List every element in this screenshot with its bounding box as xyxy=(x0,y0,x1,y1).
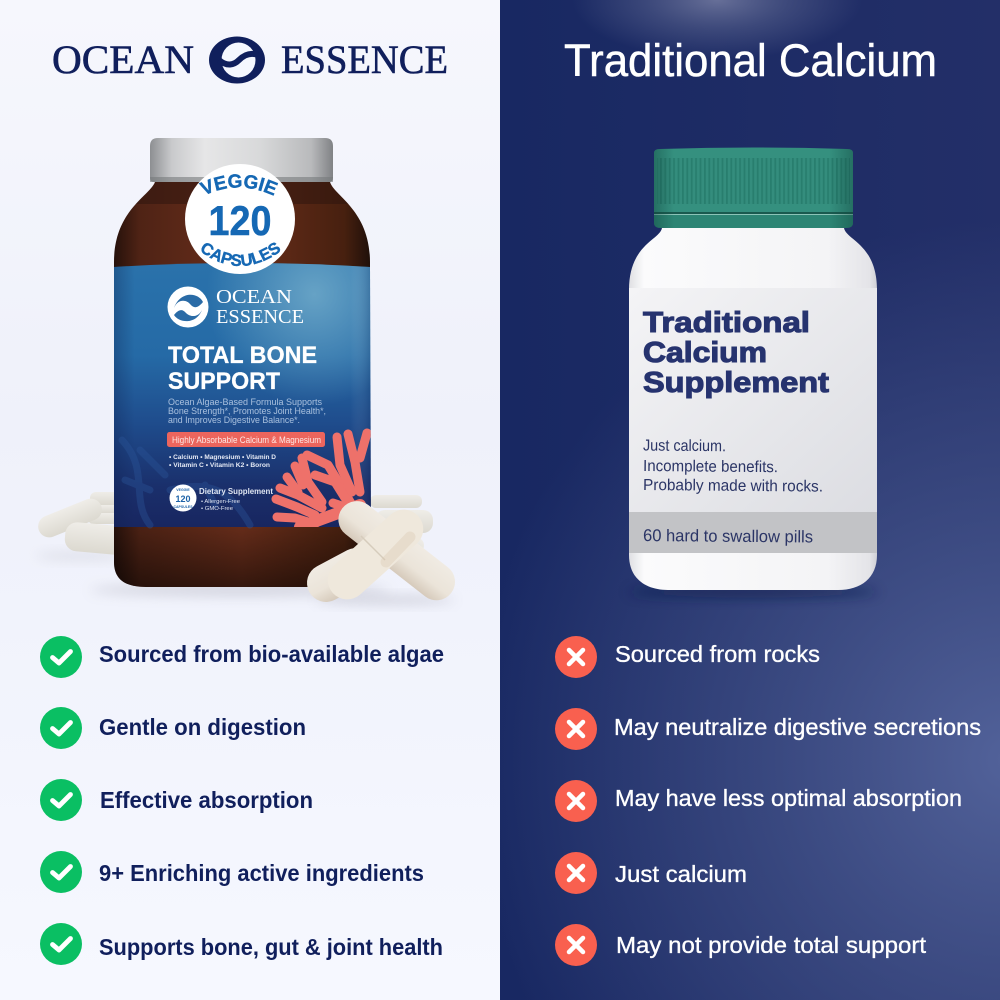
capsule badge: VEGGIE xyxy=(198,174,278,196)
label pill: Highly Absorbable Calcium & Magnesium xyxy=(172,435,321,445)
label description xyxy=(168,397,326,426)
green cap xyxy=(654,148,853,228)
label heading xyxy=(643,307,829,399)
label heading: Supplement xyxy=(643,367,829,399)
label description: Ocean Algae-Based Formula Supports xyxy=(168,397,322,408)
label description: Bone Strength*, Promotes Joint Health*, xyxy=(168,406,326,417)
ingredients xyxy=(169,454,276,469)
bottle label: SUPPORT xyxy=(168,368,280,395)
label heading: Calcium xyxy=(643,337,767,369)
label logo: ESSENCE xyxy=(216,306,304,328)
bottle label xyxy=(114,263,371,527)
silver cap xyxy=(150,138,333,182)
item: Sourced from rocks: Sourced from rocks xyxy=(615,641,820,667)
background kelp xyxy=(122,440,250,525)
capsules behind bottle xyxy=(35,492,433,560)
item: Effective absorption: Effective absorption xyxy=(100,787,313,813)
label footer: 60 hard to swallow pills xyxy=(643,526,813,546)
dietary text xyxy=(199,487,273,512)
dietary text: • GMO-Free xyxy=(201,506,233,512)
item: May neutralize digestive secretions: May neutralize digestive secretions xyxy=(614,714,981,740)
item: May have less optimal absorption xyxy=(555,780,962,822)
item: Sourced from bio-available algae xyxy=(40,636,444,678)
list: drawbacks xyxy=(555,636,981,966)
label logo: OCEAN xyxy=(216,286,292,308)
item: Just calcium xyxy=(555,852,747,894)
item: Gentle on digestion: Gentle on digestion xyxy=(99,714,306,740)
item: May have less optimal absorption: May have less optimal absorption xyxy=(615,785,962,811)
bottle glass xyxy=(114,182,370,587)
item: Just calcium: Just calcium xyxy=(615,861,747,887)
label text: Incomplete benefits. xyxy=(643,458,778,476)
heading: Ocean Essence logo: OCEAN xyxy=(52,37,194,82)
item: May not provide total support: May not provide total support xyxy=(616,932,927,958)
capsule badge: 120 xyxy=(208,197,272,244)
item: 9+ Enriching active ingredients xyxy=(40,851,424,893)
label title: TOTAL BONE xyxy=(168,342,317,369)
bottle body xyxy=(629,228,877,590)
item: May neutralize digestive secretions xyxy=(555,708,981,750)
capsule badge xyxy=(185,164,295,274)
panel: right background xyxy=(500,0,1000,1000)
item: Effective absorption xyxy=(40,779,313,821)
label text: Just calcium. xyxy=(643,438,726,455)
ingredients: • Vitamin C • Vitamin K2 • Boron xyxy=(169,462,270,469)
label text xyxy=(643,438,823,496)
mini badge: CAPSULES xyxy=(173,505,193,509)
item: Gentle on digestion xyxy=(40,707,306,749)
list: benefits xyxy=(40,636,444,965)
label logo xyxy=(168,286,304,328)
panel: left background xyxy=(0,0,500,1000)
item: Supports bone, gut & joint health: Supports bone, gut & joint health xyxy=(99,934,443,960)
product: Ocean Essence bottle with capsules xyxy=(38,138,455,608)
capsules in front xyxy=(300,494,462,609)
dietary text: • Allergen-Free xyxy=(201,499,240,505)
coral xyxy=(276,433,367,527)
product: traditional calcium bottle xyxy=(628,148,878,598)
item: Sourced from rocks xyxy=(555,636,820,678)
label heading: Traditional xyxy=(643,307,810,339)
bottle label xyxy=(629,288,877,553)
item: Sourced from bio-available algae: Sourced from bio-available algae xyxy=(99,641,444,667)
mini badge: 120 xyxy=(175,494,191,504)
capsule badge: CAPSULES xyxy=(201,242,280,266)
item: Supports bone, gut & joint health xyxy=(40,923,443,965)
label pill xyxy=(167,432,325,447)
heading: Ocean Essence logo xyxy=(52,36,448,84)
item: May not provide total support xyxy=(555,924,927,966)
mini badge xyxy=(170,484,196,512)
label text: Probably made with rocks. xyxy=(643,477,823,496)
heading: Ocean Essence logo: ESSENCE xyxy=(281,37,448,82)
heading: Traditional Calcium: Traditional Calcium xyxy=(564,35,937,86)
ingredients: • Calcium • Magnesium • Vitamin D xyxy=(169,454,276,461)
dietary text: Dietary Supplement xyxy=(199,487,273,496)
label description: and Improves Digestive Balance*. xyxy=(168,415,300,426)
item: 9+ Enriching active ingredients: 9+ Enriching active ingredients xyxy=(99,860,424,886)
mini badge: VEGGIE xyxy=(176,488,190,492)
